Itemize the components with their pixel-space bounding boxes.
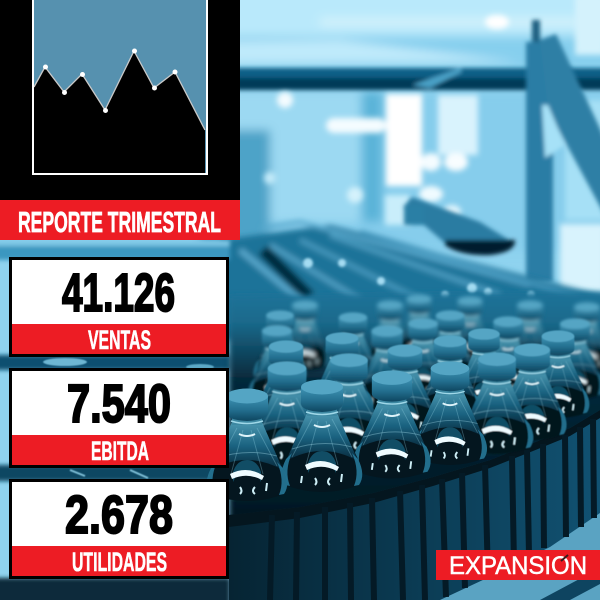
- column and diagonal brace: [526, 20, 600, 282]
- line chart: [33, 0, 207, 174]
- panel: chart header: [0, 0, 240, 200]
- distant machine: [403, 197, 515, 255]
- bottles on conveyor: [207, 294, 600, 501]
- card: ventas: VENTAS: [88, 325, 151, 355]
- card: ebitda: [10, 370, 228, 466]
- card: ebitda: EBITDA: [91, 436, 149, 466]
- title banner: REPORTE TRIMESTRAL: [18, 207, 221, 239]
- left strip behind cards: [0, 240, 230, 600]
- bokeh lights: [264, 0, 600, 294]
- title banner: [0, 200, 240, 240]
- card: ebitda: 7.540: [67, 374, 171, 434]
- conveyor belt with slats: [229, 410, 600, 600]
- card: utilidades: 2.678: [65, 485, 173, 545]
- card: ventas: 41.126: [62, 263, 175, 323]
- logo: Expansion: EXPANSION: [449, 552, 587, 580]
- card: utilidades: UTILIDADES: [72, 547, 167, 577]
- card: ventas: [10, 258, 228, 356]
- blurred conveyor rails: [220, 222, 600, 340]
- dark base under bottles: [229, 292, 600, 540]
- card: utilidades: [10, 480, 228, 578]
